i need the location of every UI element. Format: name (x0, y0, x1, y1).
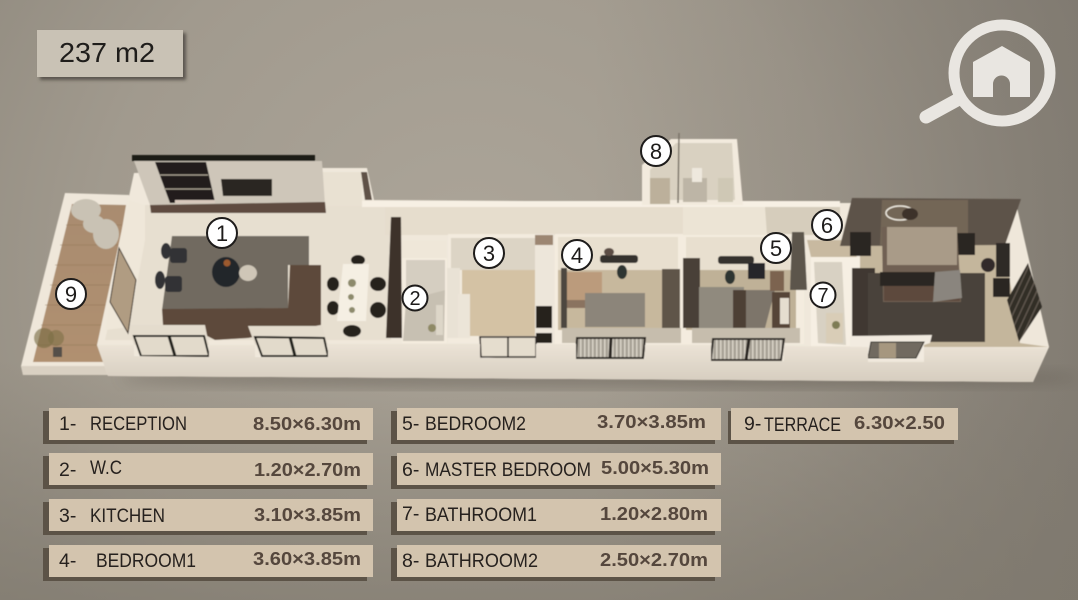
legend row 2: wc: 2- (59, 459, 76, 481)
reception walls and floor (97, 168, 1049, 382)
legend row 9: terrace (728, 408, 958, 444)
legend row 7: bathroom 1: 1.20×2.80m (600, 503, 708, 524)
legend row 3: kitchen: KITCHEN (90, 505, 165, 527)
legend row 1: reception (43, 408, 373, 444)
room marker 7 (810, 282, 836, 308)
legend row 8: bathroom 2: 8- (402, 550, 419, 572)
area badge (37, 30, 183, 77)
reception rug (162, 236, 309, 310)
room marker 6: 6 (821, 213, 833, 238)
room marker 2: 2 (409, 288, 421, 310)
legend row 8: bathroom 2 (391, 545, 721, 581)
legend row 2: wc: W.C (90, 457, 122, 479)
legend row 5: bedroom 2: BEDROOM2 (425, 413, 526, 435)
floor plan (21, 133, 1078, 389)
room marker 4 (562, 240, 592, 270)
master bedroom (840, 198, 1049, 360)
terrace (21, 193, 129, 375)
hall alcove behind bedrooms (683, 207, 767, 235)
legend row 9: terrace: 9- (744, 413, 761, 435)
room marker 4: 4 (571, 243, 583, 268)
wc (402, 240, 447, 343)
room marker 2 (402, 286, 428, 310)
feature wall with shelves and tv (132, 155, 326, 213)
legend row 4: bedroom 1: 3.60×3.85m (253, 548, 361, 569)
kitchen (447, 234, 554, 362)
terrace plant (34, 328, 64, 357)
legend row 4: bedroom 1: 4- (59, 550, 76, 572)
legend row 5: bedroom 2 (391, 408, 721, 444)
legend row 1: reception: 1- (59, 413, 76, 435)
legend row 1: reception: RECEPTION (90, 413, 187, 435)
legend row 7: bathroom 1: BATHROOM1 (425, 504, 537, 526)
legend row 6: master bedroom: 6- (402, 459, 419, 481)
legend row 8: bathroom 2: BATHROOM2 (425, 550, 538, 572)
coffee table (212, 257, 257, 287)
windows of reception (128, 325, 329, 363)
room marker 3: 3 (483, 241, 495, 266)
legend row 4: bedroom 1: BEDROOM1 (96, 550, 196, 572)
legend row 1: reception: 8.50×6.30m (253, 413, 361, 434)
legend row 7: bathroom 1 (391, 499, 721, 535)
legend row 2: wc (43, 453, 373, 489)
sofa (162, 265, 321, 340)
hall floor near master (807, 240, 860, 265)
room marker 6 (812, 210, 842, 240)
armchairs (155, 243, 187, 292)
room marker 7: 7 (817, 285, 829, 307)
room marker 5 (761, 233, 791, 263)
room marker 9: 9 (65, 282, 77, 307)
room marker 1 (207, 218, 237, 248)
legend row 6: master bedroom: MASTER BEDROOM (425, 459, 591, 481)
bedroom 2 (682, 232, 807, 360)
legend row 3: kitchen (43, 499, 373, 535)
legend row 2: wc: 1.20×2.70m (254, 459, 361, 480)
icon: magnifier with house logo (926, 25, 1050, 121)
room marker 3 (474, 238, 504, 268)
bathroom 2 (642, 133, 743, 205)
area badge: 237 m2 (59, 37, 155, 68)
legend row 8: bathroom 2: 2.50×2.70m (600, 549, 708, 570)
bathroom 1 (811, 257, 861, 346)
legend row 3: kitchen: 3- (59, 505, 76, 527)
dark wall slab (386, 217, 402, 338)
legend row 6: master bedroom (391, 453, 721, 489)
legend row 9: terrace: TERRACE (764, 414, 841, 436)
legend row 5: bedroom 2: 5- (402, 413, 419, 435)
bedroom 1 (555, 234, 682, 364)
room marker 8 (641, 136, 671, 166)
room marker 8: 8 (650, 139, 662, 164)
room marker 9 (56, 279, 86, 309)
terrace armchairs (71, 199, 119, 249)
legend row 9: terrace: 6.30×2.50 (854, 412, 945, 433)
dining table and chairs (327, 255, 386, 337)
room marker 5: 5 (770, 236, 782, 261)
legend row 6: master bedroom: 5.00×5.30m (601, 457, 709, 478)
room marker 1: 1 (216, 221, 228, 246)
glass door to terrace (110, 248, 136, 333)
legend row 4: bedroom 1 (43, 545, 373, 581)
legend row 3: kitchen: 3.10×3.85m (254, 504, 361, 525)
legend row 7: bathroom 1: 7- (402, 503, 419, 525)
legend row 5: bedroom 2: 3.70×3.85m (597, 411, 706, 432)
front wall (97, 344, 1048, 382)
